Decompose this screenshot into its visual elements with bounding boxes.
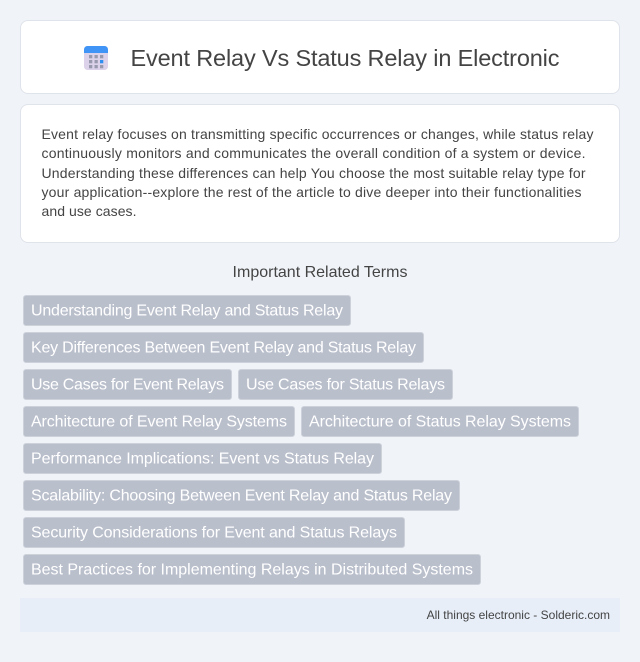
tag: Use Cases for Event Relays [31, 376, 224, 394]
tag: Understanding Event Relay and Status Relay [31, 302, 343, 320]
icon: calendar [84, 46, 108, 70]
tag [23, 517, 405, 548]
tag: Architecture of Event Relay Systems [31, 414, 287, 430]
footer: All things electronic - Solderic.com [427, 608, 610, 622]
tag [23, 332, 424, 363]
section heading: Important Related Terms [233, 264, 407, 281]
tag [301, 406, 579, 437]
intro text [42, 126, 594, 219]
tag: Key Differences Between Event Relay and Status Relay [31, 340, 416, 356]
tag: Architecture of Status Relay Systems [309, 414, 571, 430]
tag [23, 554, 481, 585]
tag: Best Practices for Implementing Relays in Distributed Systems [31, 562, 473, 578]
intro text panel [20, 104, 620, 243]
tag [23, 443, 382, 474]
intro text: your application--explore the rest of the article to dive deeper into their functionalities [42, 184, 582, 200]
tag: Scalability: Choosing Between Event Relay and Status Relay [31, 488, 452, 504]
intro text: continuously monitors and communicates the overall condition of a system or device. [42, 145, 586, 161]
header card [20, 20, 620, 94]
footer [20, 598, 620, 632]
tag [23, 369, 232, 400]
tag [238, 369, 453, 400]
title: Event Relay Vs Status Relay in Electronic [130, 45, 560, 71]
tag: Use Cases for Status Relays [246, 376, 445, 394]
intro text: Understanding these differences can help You choose the most suitable relay type for [42, 165, 586, 181]
tag: Performance Implications: Event vs Status Relay [31, 450, 374, 468]
tag: Security Considerations for Event and Status Relays [31, 524, 397, 542]
tag list [23, 295, 579, 585]
intro text: and use cases. [42, 203, 136, 219]
tag [23, 480, 460, 511]
intro text: Event relay focuses on transmitting specific occurrences or changes, while status relay [42, 126, 594, 142]
tag [23, 406, 295, 437]
tag [23, 295, 351, 326]
